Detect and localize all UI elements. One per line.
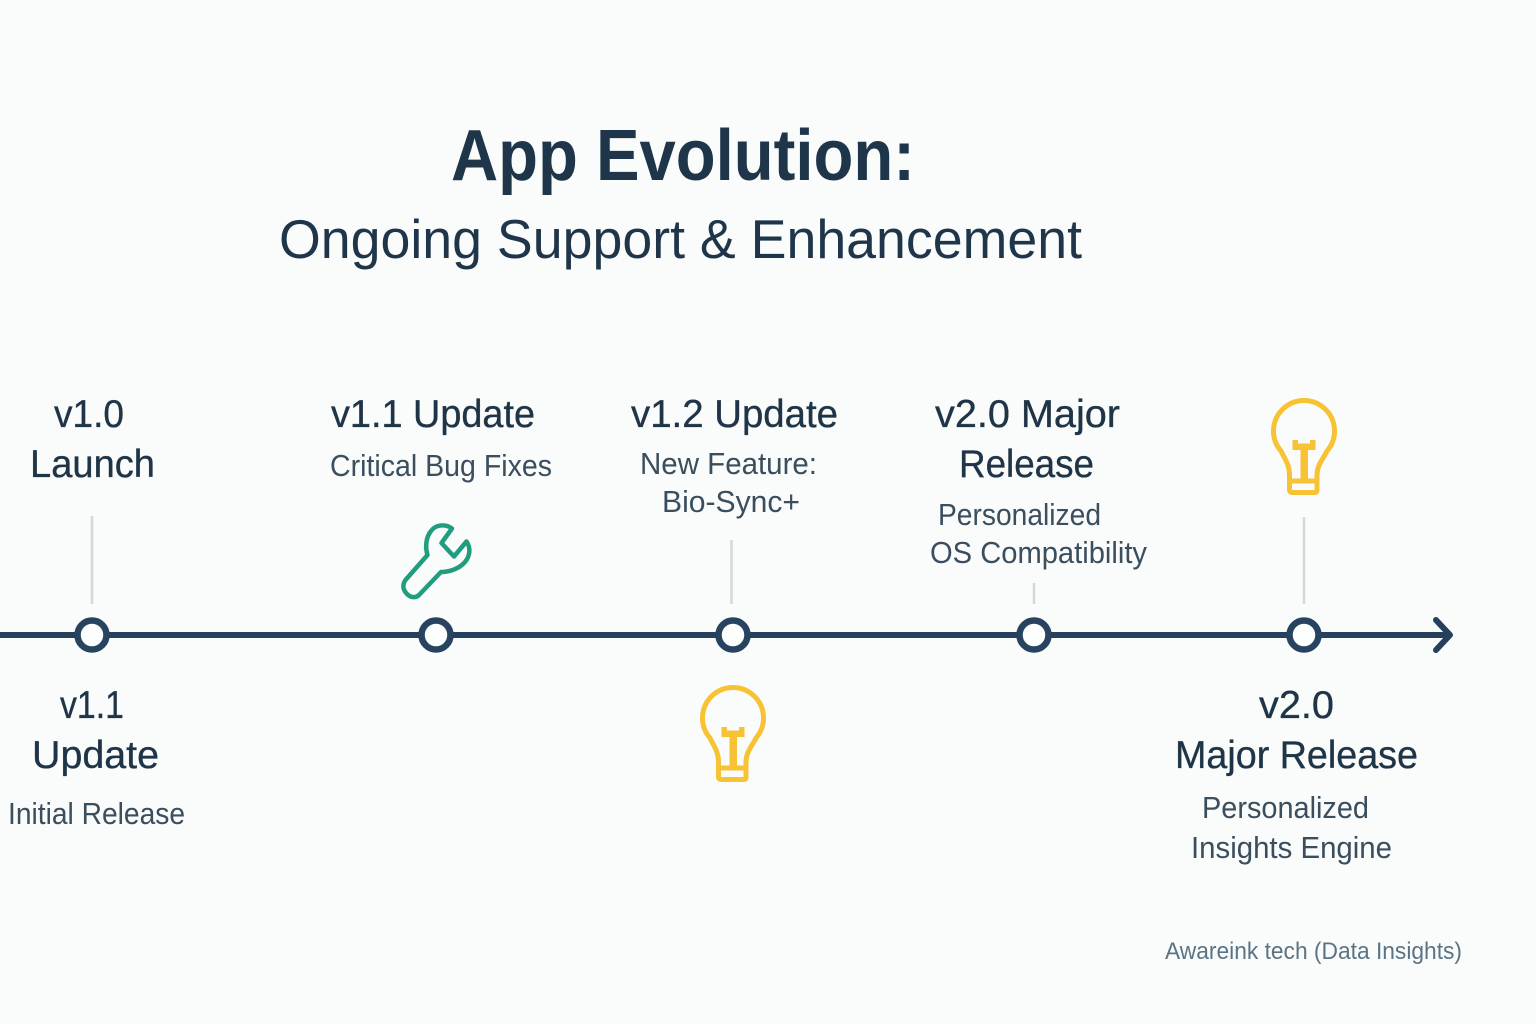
milestone 3: v1.2 update: Bio-Sync+: [662, 484, 800, 519]
milestone 5: v2.0 major release with insights engine: Personalized: [1202, 790, 1369, 825]
icon: light bulb: [702, 687, 764, 780]
milestone 4: v2.0 major release: Release: [959, 443, 1094, 486]
milestone 2: v1.1 update: Critical Bug Fixes: [330, 448, 552, 483]
milestone 3: v1.2 update: v1.2 Update: [631, 393, 838, 436]
milestone 1: v1.0 launch: [8, 393, 185, 831]
milestone 5: v2.0 major release with insights engine: Insights Engine: [1191, 830, 1392, 865]
milestone 2: v1.1 update: [330, 393, 552, 650]
title: Ongoing Support & Enhancement: [279, 208, 1082, 270]
title: App Evolution:: [451, 116, 915, 196]
milestone 1: v1.0 launch: v1.0: [54, 393, 124, 436]
milestone 1: v1.0 launch: Initial Release: [8, 796, 185, 831]
milestone 5: v2.0 major release with insights engine: [1175, 400, 1418, 865]
icon: light bulb: [1274, 400, 1334, 492]
milestone 3: v1.2 update: [631, 393, 838, 780]
timeline axis with arrow: [0, 620, 1450, 650]
milestone 3: v1.2 update: New Feature:: [640, 446, 817, 481]
milestone 4: v2.0 major release: v2.0 Major: [935, 393, 1120, 436]
milestone 4: v2.0 major release: [930, 393, 1147, 650]
milestone 1: v1.0 launch: Launch: [30, 443, 155, 486]
milestone 1: v1.0 launch: Update: [32, 734, 159, 777]
milestone 5: v2.0 major release with insights engine: v2.0: [1259, 684, 1334, 727]
milestone 4: v2.0 major release: OS Compatibility: [930, 535, 1147, 570]
icon: wrench: [403, 525, 469, 597]
milestone 4: v2.0 major release: Personalized: [938, 497, 1101, 532]
attribution: Awareink tech (Data Insights): [1165, 938, 1462, 965]
milestone 2: v1.1 update: v1.1 Update: [331, 393, 535, 436]
milestone 1: v1.0 launch: v1.1: [60, 684, 124, 727]
milestone 5: v2.0 major release with insights engine: Major Release: [1175, 734, 1418, 777]
title: [279, 116, 1082, 270]
